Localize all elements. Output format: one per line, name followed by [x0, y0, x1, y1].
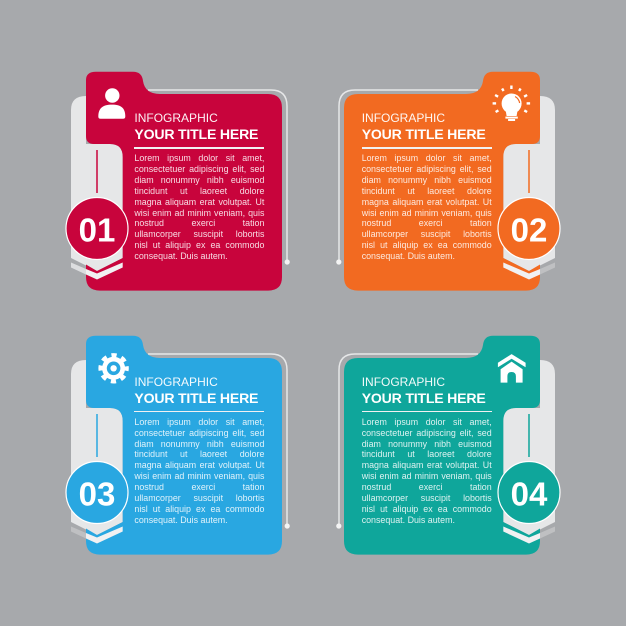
card artwork [337, 335, 560, 554]
grey side tab [504, 360, 555, 535]
chevron [71, 262, 123, 280]
subtitle: INFOGRAPHIC [362, 375, 445, 389]
body text: nisl ut aliquip ex ea commodo [362, 504, 492, 514]
body text [134, 153, 264, 261]
body text: consequat. Duis autem. [362, 251, 455, 261]
body text: nisl ut aliquip ex ea commodo [134, 504, 264, 514]
title: YOUR TITLE HERE [134, 126, 258, 142]
title: YOUR TITLE HERE [134, 390, 258, 406]
text block 03 [134, 375, 264, 525]
number badge 03 [66, 461, 128, 523]
grey side tab [504, 96, 555, 271]
body text: wisi enim ad minim veniam, quis [362, 471, 492, 481]
body text: consectetuer adipiscing elit, sed [362, 428, 492, 438]
vertical line [96, 150, 98, 193]
body text: ullamcorper suscipit lobortis [362, 229, 492, 239]
body text: tincidunt ut laoreet dolore [362, 186, 492, 196]
chevron [71, 526, 123, 543]
connector line with end dot [148, 354, 290, 528]
body text: nostrud exerci tation [134, 482, 264, 492]
panel: card 01 (red) [65, 72, 290, 291]
body text: consectetuer adipiscing elit, sed [134, 164, 264, 174]
chevron [504, 262, 555, 280]
body text: nisl ut aliquip ex ea commodo [362, 240, 492, 250]
vertical line [528, 150, 530, 193]
body text: magna aliquam erat volutpat. Ut [134, 197, 264, 207]
body text: wisi enim ad minim veniam, quis [134, 471, 264, 481]
body text: magna aliquam erat volutpat. Ut [362, 197, 492, 207]
grey side tab [71, 96, 123, 271]
body text: Lorem ipsum dolor sit amet, [362, 153, 492, 163]
body text: magna aliquam erat volutpat. Ut [134, 460, 264, 470]
body text: consectetuer adipiscing elit, sed [134, 428, 264, 438]
body text: nostrud exerci tation [134, 218, 264, 228]
body text: tincidunt ut laoreet dolore [362, 449, 492, 459]
subtitle: INFOGRAPHIC [134, 111, 218, 125]
connector line with end dot [337, 90, 478, 265]
icon: light bulb [493, 86, 530, 121]
body text: consequat. Duis autem. [362, 515, 455, 525]
card shape [86, 335, 282, 554]
body text: magna aliquam erat volutpat. Ut [362, 460, 492, 470]
body text: wisi enim ad minim veniam, quis [134, 208, 264, 218]
card artwork [66, 335, 290, 554]
text block 02 [362, 111, 492, 261]
body text: wisi enim ad minim veniam, quis [362, 208, 492, 218]
subtitle: INFOGRAPHIC [362, 111, 445, 125]
body text: consequat. Duis autem. [134, 251, 228, 261]
body text [362, 153, 492, 261]
body text: consequat. Duis autem. [134, 515, 228, 525]
body text: nostrud exerci tation [362, 218, 492, 228]
body text: tincidunt ut laoreet dolore [134, 449, 264, 459]
card shape [344, 72, 540, 291]
body text: consectetuer adipiscing elit, sed [362, 164, 492, 174]
body text: tincidunt ut laoreet dolore [134, 186, 264, 196]
number 02: 02 [511, 212, 548, 248]
body text: diam nonummy nibh euismod [362, 175, 492, 185]
body text: nisl ut aliquip ex ea commodo [134, 240, 264, 250]
number 04: 04 [511, 475, 548, 512]
body text: ullamcorper suscipit lobortis [362, 493, 492, 503]
body text: diam nonummy nibh euismod [134, 175, 264, 185]
number badge 03: 03 [79, 475, 115, 512]
subtitle: INFOGRAPHIC [134, 375, 218, 389]
number badge 01: 01 [79, 212, 115, 248]
card shape [344, 335, 540, 554]
title: YOUR TITLE HERE [362, 126, 486, 142]
title: YOUR TITLE HERE [362, 390, 486, 406]
text block 04 [362, 375, 492, 525]
icon: person [98, 88, 125, 119]
connector line with end dot [337, 354, 478, 528]
body text: Lorem ipsum dolor sit amet, [362, 417, 492, 427]
connector line with end dot [148, 90, 290, 265]
body text: diam nonummy nibh euismod [134, 439, 264, 449]
icon: house [498, 354, 526, 382]
grey side tab [71, 360, 123, 535]
icon: gear [101, 355, 126, 381]
number badge 01 [66, 198, 128, 260]
body text: ullamcorper suscipit lobortis [134, 229, 264, 239]
body text: ullamcorper suscipit lobortis [134, 493, 264, 503]
body text: Lorem ipsum dolor sit amet, [134, 417, 264, 427]
card shape [86, 72, 282, 291]
card artwork [337, 72, 560, 291]
badge circle [498, 461, 560, 523]
vertical line [96, 414, 98, 457]
panel: card 03 (blue) [65, 336, 290, 555]
body text: Lorem ipsum dolor sit amet, [134, 153, 264, 163]
body text: nostrud exerci tation [362, 482, 492, 492]
panel: card 02 (orange) [336, 72, 561, 291]
body text: diam nonummy nibh euismod [362, 439, 492, 449]
panel: card 04 (teal) [336, 336, 561, 555]
text block 01 [134, 111, 264, 261]
chevron [504, 526, 555, 543]
body text [362, 417, 492, 525]
vertical line [528, 414, 530, 457]
badge circle [498, 198, 560, 260]
body text [134, 417, 264, 525]
